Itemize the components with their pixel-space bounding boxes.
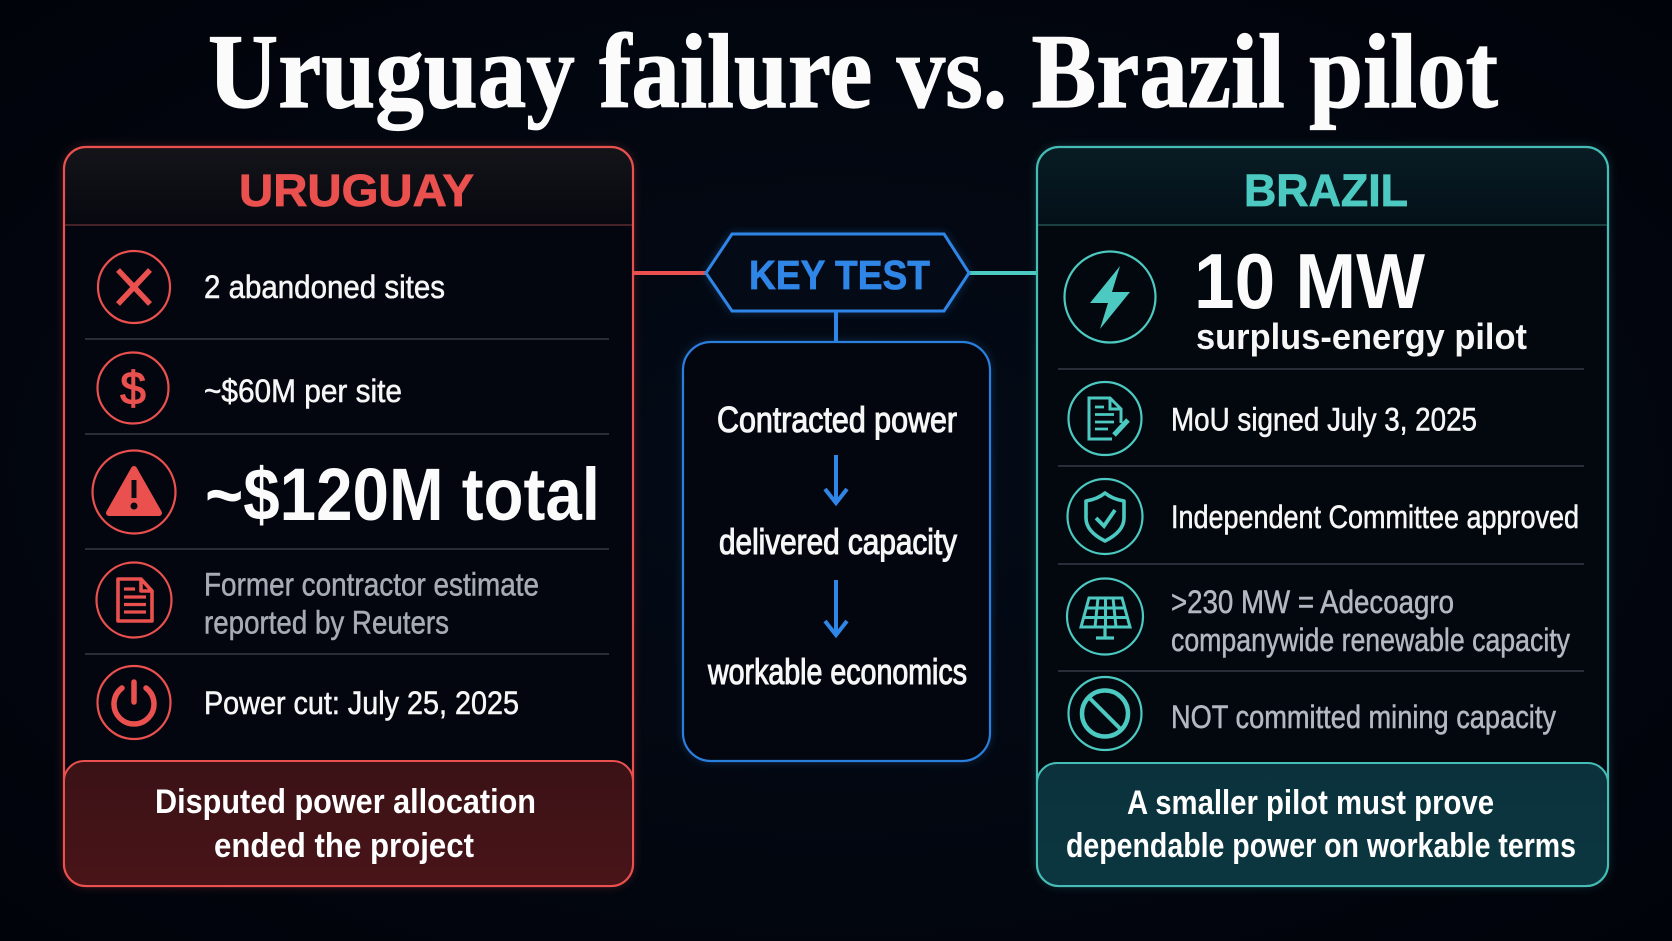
text: workable economics: workable economics <box>707 651 967 692</box>
text: delivered capacity: delivered capacity <box>719 521 957 562</box>
callout: Uruguay <box>64 761 633 886</box>
callout: Uruguay: ended the project <box>214 827 474 865</box>
icon: prohibited <box>1068 677 1142 750</box>
panel: Uruguay <box>64 147 633 886</box>
connector: key test to box <box>834 311 838 342</box>
icon: shield <box>1068 479 1142 554</box>
arrow: down 1 <box>825 455 847 503</box>
badge: KEY TEST <box>706 234 969 311</box>
row: MoU: MoU signed July 3, 2025 <box>1171 402 1477 438</box>
row: power cut: Power cut: July 25, 2025 <box>204 685 519 721</box>
big number: 10 MW pilot: surplus-energy pilot <box>1196 316 1527 357</box>
row: not committed: NOT committed mining capacity <box>1171 699 1556 735</box>
icon: dollar <box>98 352 168 424</box>
icon: warning <box>92 450 176 534</box>
row: capacity note: companywide renewable capacity <box>1171 622 1570 658</box>
icon: document <box>96 562 172 638</box>
row: source note: reported by Reuters <box>204 604 449 640</box>
connector: Uruguay to key test <box>633 271 706 275</box>
connector: Brazil to key test <box>969 271 1037 275</box>
row: capacity note: >230 MW = Adecoagro <box>1171 584 1454 620</box>
title: Uruguay failure vs. Brazil pilot <box>208 13 1498 130</box>
callout: Brazil: A smaller pilot must prove <box>1127 784 1494 822</box>
big number: 10 MW pilot <box>1194 237 1527 357</box>
panel: Brazil <box>1037 147 1608 886</box>
big number: 10 MW pilot: 10 MW <box>1194 237 1425 325</box>
callout: Brazil <box>1037 763 1608 886</box>
row: source note: Former contractor estimate <box>204 566 539 602</box>
icon: lightning bolt <box>1064 252 1156 342</box>
arrow: down 2 <box>825 580 847 635</box>
row: cost per site: ~$60M per site <box>204 373 402 409</box>
row: committee: Independent Committee approved <box>1171 499 1579 535</box>
big number: total: ~$120M total <box>205 453 600 536</box>
callout: Brazil: dependable power on workable terms <box>1066 827 1576 865</box>
row: source note <box>204 566 539 640</box>
callout: Uruguay: Disputed power allocation <box>155 783 536 821</box>
icon: power <box>98 666 170 739</box>
heading: BRAZIL: BRAZIL <box>1244 165 1408 216</box>
row: abandoned sites: 2 abandoned sites <box>204 269 445 305</box>
heading: URUGUAY: URUGUAY <box>239 165 474 216</box>
icon: X <box>98 251 170 323</box>
icon: signed document <box>1068 382 1142 455</box>
row: capacity note <box>1171 584 1570 658</box>
icon: solar panel <box>1067 578 1143 654</box>
text: contracted power: Contracted power <box>717 399 957 440</box>
icon: dollar: $ <box>120 362 146 414</box>
panel: key test chain <box>683 342 990 761</box>
badge: KEY TEST: KEY TEST <box>749 252 930 298</box>
